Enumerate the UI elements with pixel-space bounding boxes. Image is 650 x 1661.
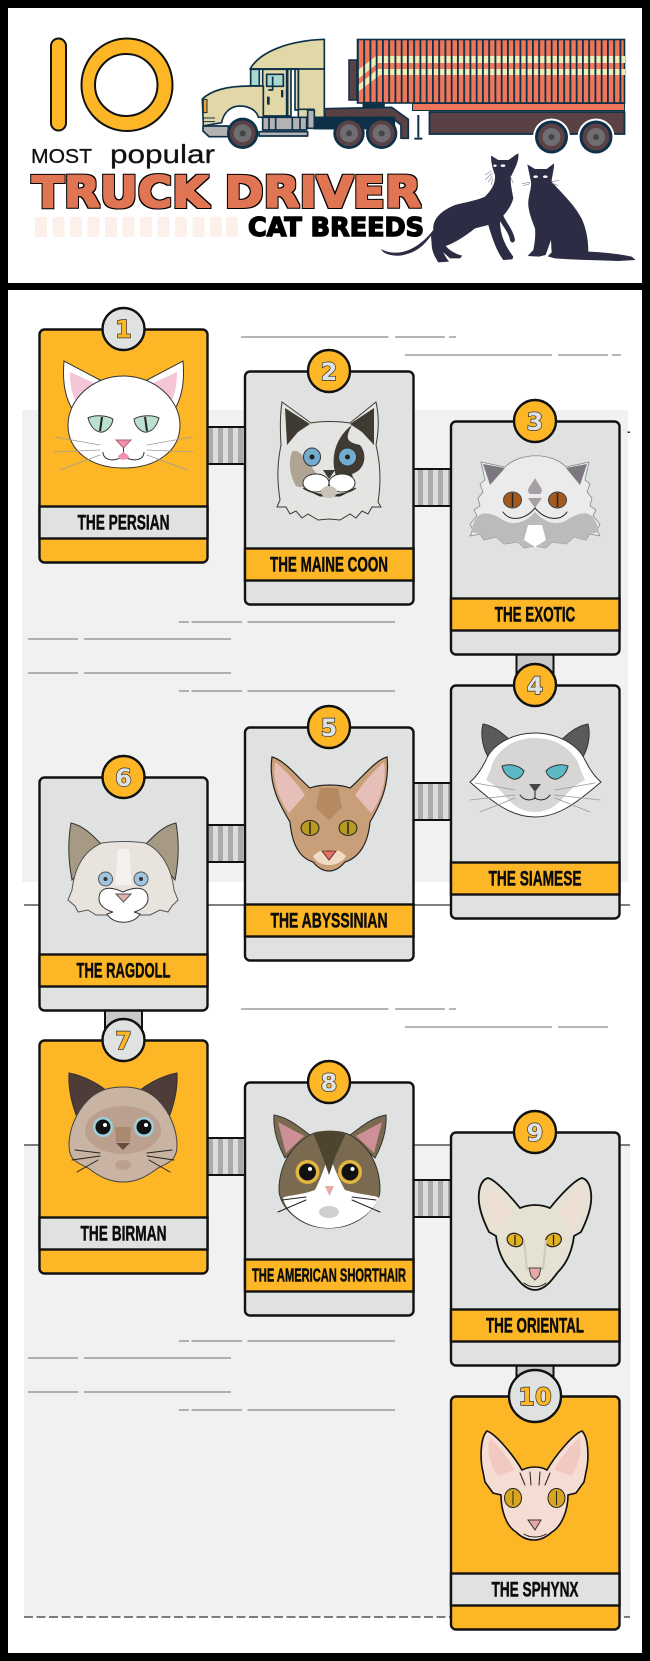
badge 7 — [102, 1019, 144, 1061]
badge 9: 9 — [527, 1119, 543, 1147]
card 4: the siamese — [451, 686, 620, 918]
panel: header — [8, 8, 642, 283]
title: truck driver: TRUCK DRIVER — [32, 168, 421, 218]
right cat — [522, 163, 636, 261]
card 3: the exotic — [451, 422, 620, 654]
big number 10 — [51, 38, 172, 131]
icon: maine coon cat face — [277, 402, 381, 520]
card 5: the abyssinian — [245, 728, 414, 960]
icon: oriental cat face — [479, 1178, 591, 1290]
subtitle: most popular: MOST — [31, 146, 92, 168]
card 1: the persian: THE PERSIAN — [78, 512, 170, 534]
card 8: the american shorthair — [245, 1082, 414, 1316]
subtitle: most popular — [31, 139, 215, 169]
subtitle: most popular: popular — [110, 139, 215, 169]
card 9: the oriental: THE ORIENTAL — [486, 1314, 584, 1338]
title: cat breeds: CAT BREEDS — [248, 213, 424, 243]
badge 10 — [509, 1370, 561, 1422]
truck illustration — [202, 39, 625, 156]
connectors between cards — [105, 427, 554, 1401]
icon: sphynx cat face — [481, 1431, 588, 1540]
card 7: the birman: THE BIRMAN — [80, 1222, 166, 1246]
black cat silhouettes — [381, 153, 636, 262]
redacted text lines upper block — [28, 337, 621, 691]
card 10: the sphynx — [451, 1396, 620, 1630]
redacted text lines lower block — [28, 1009, 608, 1410]
icon: exotic cat face — [470, 456, 600, 548]
trailer — [349, 40, 625, 156]
grey band upper — [22, 410, 628, 882]
icon: abyssinian cat face — [271, 757, 388, 871]
icon: birman cat face — [69, 1073, 177, 1182]
card 7: the birman — [40, 1040, 208, 1274]
badge 8: 8 — [321, 1069, 337, 1097]
card 4: the siamese: THE SIAMESE — [488, 868, 582, 890]
badge 1 — [102, 308, 144, 350]
badge 5: 5 — [321, 714, 337, 742]
badge 1: 1 — [115, 316, 132, 344]
badge 3 — [514, 400, 556, 442]
card 8: the american shorthair: THE AMERICAN SHORTHAIR — [252, 1266, 406, 1286]
badge 8 — [308, 1061, 350, 1103]
badge 3: 3 — [527, 408, 543, 436]
badge 9 — [514, 1111, 556, 1153]
card 1: the persian — [40, 330, 208, 562]
icon: siamese cat face — [470, 724, 601, 817]
card 10: the sphynx: THE SPHYNX — [492, 1578, 578, 1602]
card 2: the maine coon — [245, 372, 414, 604]
card 5: the abyssinian: THE ABYSSINIAN — [270, 910, 388, 932]
card 6: the ragdoll — [40, 778, 208, 1010]
pale dashes — [35, 217, 238, 237]
card 6: the ragdoll: THE RAGDOLL — [76, 960, 171, 982]
tractor cab — [202, 39, 422, 149]
badge 2 — [308, 350, 350, 392]
badge 6 — [102, 756, 144, 798]
badge 5 — [308, 706, 350, 748]
card 9: the oriental — [451, 1132, 620, 1366]
left cat — [381, 153, 518, 262]
card 2: the maine coon: THE MAINE COON — [270, 554, 388, 576]
icon: american shorthair cat face — [274, 1115, 386, 1228]
badge 6: 6 — [115, 764, 132, 792]
icon: white persian cat face — [54, 361, 193, 470]
card 3: the exotic: THE EXOTIC — [495, 604, 575, 626]
badge 7: 7 — [115, 1027, 132, 1055]
badge 4: 4 — [527, 672, 543, 700]
icon: ragdoll cat face — [68, 823, 178, 922]
badge 2: 2 — [321, 358, 337, 386]
badge 4 — [514, 664, 556, 706]
grey band lower — [24, 1145, 630, 1617]
badge 10: 10 — [518, 1383, 552, 1411]
